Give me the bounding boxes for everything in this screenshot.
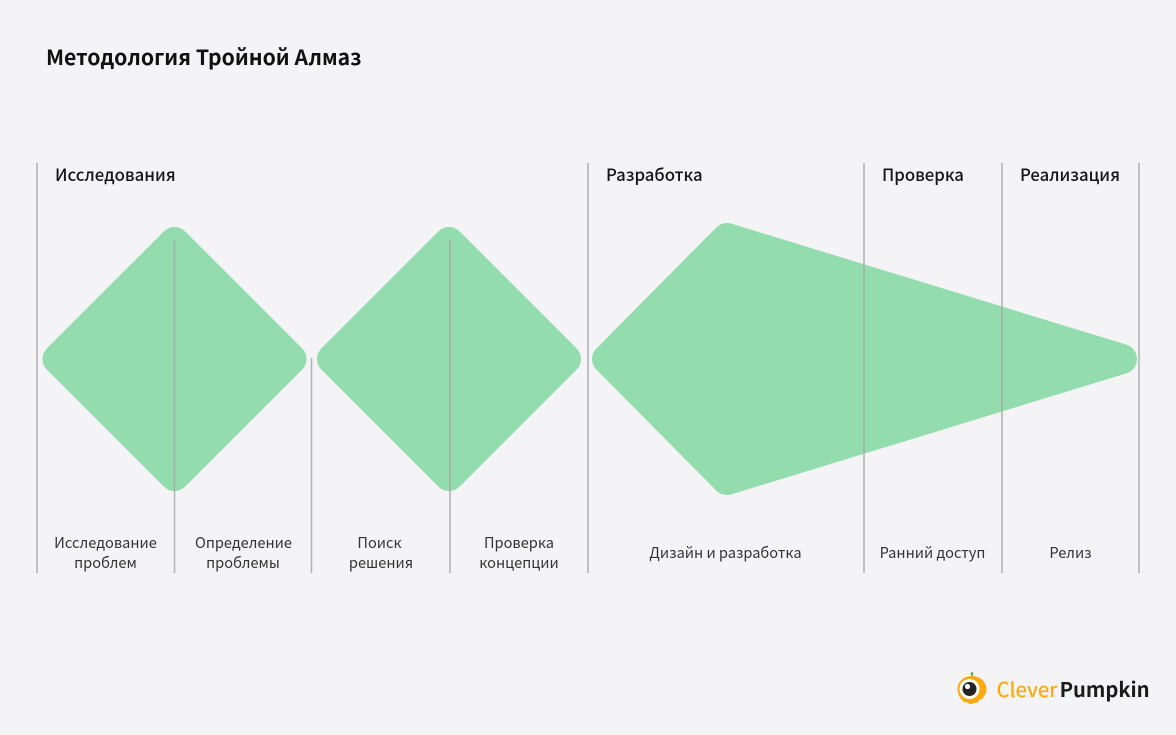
phase headings: Проверка [882, 162, 964, 186]
step labels: Проверка [484, 532, 554, 553]
step labels: Релиз [1049, 542, 1092, 563]
phase headings: Реализация [1020, 162, 1120, 186]
step labels: проблемы [206, 552, 280, 573]
title: Методология Тройной Алмаз [46, 41, 361, 72]
elongated diamond: development to release [607, 238, 1122, 480]
step labels: решения [349, 552, 413, 573]
step labels: проблем [74, 552, 137, 573]
step labels: Определение [195, 532, 292, 553]
diamond: solution search [332, 242, 566, 476]
icon: pumpkin mascot [958, 672, 986, 704]
phase headings: Исследования [55, 162, 176, 186]
step labels: Исследование [54, 532, 157, 553]
step labels: Поиск [357, 532, 402, 553]
step labels: Дизайн и разработка [649, 542, 802, 563]
step labels: Ранний доступ [880, 542, 985, 563]
wordmark: CleverPumpkin [996, 674, 1150, 703]
logo: CleverPumpkin [958, 672, 1150, 704]
step labels [54, 532, 1092, 573]
phase headings [55, 162, 1120, 186]
diamond: research [58, 242, 292, 476]
step labels: концепции [479, 552, 559, 573]
phase headings: Разработка [606, 162, 703, 186]
